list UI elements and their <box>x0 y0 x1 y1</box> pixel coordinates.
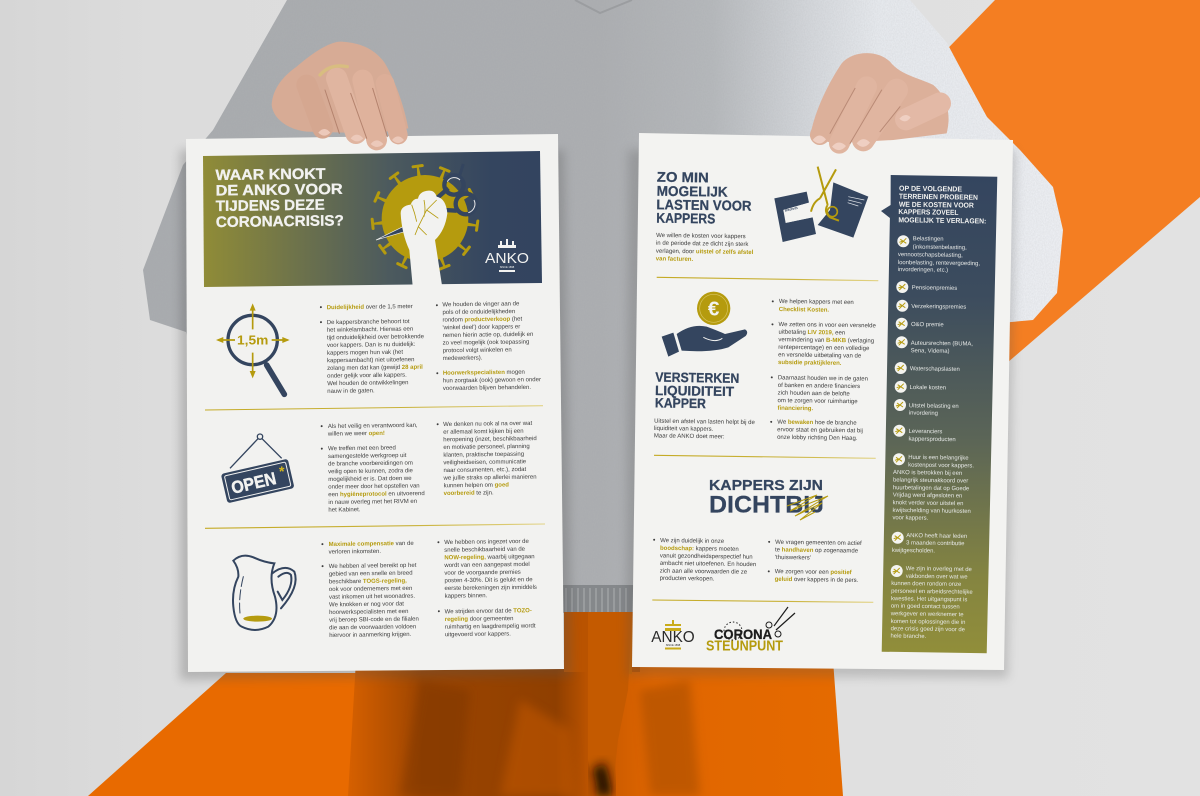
section 3 right column: wordt van een aangepast model <box>443 562 530 569</box>
panel list: loonbelasting, rentevergoeding, <box>898 260 980 267</box>
liquidity bullets: uitbetaling LIV 2019, een <box>778 330 845 337</box>
panel paragraph: huur: kostenpost voor kappers. <box>908 463 974 469</box>
icon: water jug <box>233 556 296 630</box>
section 1 right column: pols of de onduidelijkheden <box>442 309 515 316</box>
icon: euro coin <box>697 292 730 325</box>
icon: Corona Steunpunt logo: CORONA <box>714 626 772 642</box>
liquidity bullets: We zetten ons in voor een versnelde <box>779 322 877 329</box>
section 3 right column: kappers binnen. <box>445 593 488 600</box>
left hand holding poster <box>272 42 408 147</box>
section 1 right column: zo veel mogelijk (ook toepassing <box>443 340 529 347</box>
panel list: Belastingen <box>913 236 944 243</box>
section 3 right column: snelle beschikbaarheid van de <box>444 547 526 554</box>
left poster text, slightly skewed with the sheet <box>215 163 543 641</box>
section 1 right column: We houden de vinger aan de <box>442 301 520 308</box>
section 2 right column: we jullie straks op allerlei manieren <box>442 475 537 482</box>
heading: versterken liquiditeit <box>655 370 739 412</box>
heading: kappers zijn dichtbij: DICHTBIJ <box>709 492 824 518</box>
paper <box>186 134 564 672</box>
section 2 left column: We treffen met een breed <box>328 445 396 452</box>
panel list: kappersproducten <box>908 437 956 443</box>
right poster <box>632 133 1013 670</box>
panel paragraph: huur: ANKO is betrokken bij een <box>893 470 962 477</box>
panel paragraph: vakbonden: We zijn in overleg met de <box>906 566 973 573</box>
ANKO logo white <box>485 239 529 272</box>
intro text: in de periode dat ze dicht zijn sterk <box>656 241 749 248</box>
panel paragraph: contributie: kwijtgescholden. <box>892 548 935 555</box>
section 3 right column: We hebben ons ingezet voor de <box>444 539 530 546</box>
icon: Corona Steunpunt logo: STEUNPUNT <box>706 638 783 654</box>
section 2 left column: samengestelde werkgroep uit <box>328 453 407 460</box>
section 1 left column: voor kappers. Dan is nu duidelijk: <box>327 342 416 349</box>
panel paragraph: huur: huurbetalingen dat op Goede <box>893 485 970 492</box>
icon: Corona Steunpunt logo <box>706 607 795 654</box>
panel paragraph: vakbonden: hele branche. <box>890 634 927 640</box>
section 1 left column: De kappersbranche behoort tot <box>327 319 410 326</box>
section 1 left column: Wel houden de ontwikkelingen <box>327 380 408 387</box>
right poster shadow <box>626 150 1016 678</box>
section 1 left column: kappersambacht) niet uitoefenen <box>327 357 414 364</box>
liquidity bullets: onze lobby richting Den Haag. <box>777 435 858 442</box>
divider <box>205 406 543 410</box>
right hand holding poster <box>810 53 949 150</box>
icon: ANKO logo gold and black <box>651 620 695 650</box>
section 2 right column: kunnen helpen om goed <box>444 482 509 489</box>
closed section bullets right: We vragen gemeenten om actief <box>775 540 862 547</box>
section 1 right column: medewerkers). <box>443 356 483 362</box>
section 2 left column: onder meer door het opstellen van <box>328 483 420 491</box>
section 1 left column: kappers mogen hun vak (het <box>327 350 403 357</box>
section 1 right column: voorwaarden blijven behandelen. <box>443 385 531 392</box>
section 3 left column <box>321 541 419 639</box>
right poster text, slightly skewed with the sheet <box>651 169 987 641</box>
section 3 left column: verloren inkomsten. <box>329 549 381 556</box>
section 1 left column: zolang men dat kan (gewijd 28 april <box>327 365 423 372</box>
section 1 right column: hun zorgtaak (ook) gewoon en onder <box>443 377 541 384</box>
section 3 right column: uitgevoerd voor kappers. <box>445 631 511 638</box>
heading: versterken liquiditeit: VERSTERKEN <box>655 370 739 386</box>
panel heading: MOGELIJK TE VERLAGEN: <box>898 215 986 225</box>
divider <box>657 277 878 281</box>
heading: zo min mogelijk lasten <box>656 169 752 227</box>
section 2 right column: naar consumenten, etc.), zodat <box>443 467 527 474</box>
section 1 left column: nauw in de gaten. <box>327 388 375 395</box>
section 3 left column: hiervoor in aanmerking krijgen. <box>329 632 412 639</box>
panel list: Waterschapslasten <box>910 366 960 373</box>
section 1 right column: 'winkel deel') door kappers er <box>443 324 520 331</box>
panel list: Verzekeringspremies <box>911 304 966 311</box>
section 1 left column: het winkelambacht. Hierwas een <box>327 327 413 334</box>
person: orange trousers <box>348 612 843 796</box>
panel heading: KAPPERS ZOVEEL <box>898 207 959 217</box>
section 1 right column: Hoorwerkspecialisten mogen <box>443 370 525 377</box>
heading: zo min mogelijk lasten: KAPPERS <box>656 210 715 227</box>
section 3 right column: We strijden ervoor dat de TOZO- <box>445 608 532 615</box>
liquidity bullets: Daarnaast houden we in de gaten <box>778 375 868 383</box>
panel heading <box>898 184 987 225</box>
icon: ANKO logo gold and black: ANKO <box>651 629 695 646</box>
section 3 left column: ook voor ondernemers met een <box>329 586 412 593</box>
liquidity intro text: Uitstel en afstel van lasten helpt bij de <box>654 419 756 426</box>
icon: magnifier with 1,5m <box>216 303 290 394</box>
panel paragraph: huur <box>892 455 974 522</box>
liquidity bullets: We helpen kappers met een <box>779 299 854 306</box>
section 3 right column: voor de voorgaande premies <box>444 570 521 577</box>
closed section bullets right: We zorgen voor een positief <box>775 569 853 576</box>
section 3 right column: regeling door gemeenten <box>445 616 513 623</box>
panel heading: TERREINEN PROBEREN <box>899 192 978 202</box>
illustration: fist with scissors on virus <box>372 164 478 286</box>
section 2 left column: mogelijkheid er is. Dat doen we <box>328 476 412 483</box>
section 2 left column <box>321 423 425 514</box>
panel paragraph: contributie <box>892 533 967 555</box>
closed section bullets left: zich aan alle voorwaarden die ze <box>660 568 748 576</box>
virus <box>372 166 478 269</box>
liquidity bullets: of banken en andere financiers <box>778 383 860 390</box>
liquidity bullets: subsidie praktijkleren. <box>778 360 842 367</box>
section 3 left column: vast inkomen uit het woonadres. <box>329 594 415 601</box>
scissors <box>376 164 476 240</box>
liquidity bullets: We bewaken hoe de branche <box>777 420 857 427</box>
panel list: vennootschapsbelasting, <box>898 252 963 259</box>
section 2 left column: Als het veilig en verantwoord kan, <box>328 423 418 430</box>
panel list: O&O premie <box>911 322 944 328</box>
icon: invoice cut by scissors <box>774 167 868 242</box>
panel paragraph: huur: belangrijk steunakkoord over <box>893 478 968 485</box>
section 1 right column: nemen hierin actie op, duidelijk en <box>443 332 533 339</box>
panel paragraph: vakbonden: kwesties. Het uitgangspunt is <box>891 596 967 603</box>
section 2 left column: een hygiëneprotocol en uitvoerend <box>328 491 425 498</box>
section 1 right column: rondom productverkoop (het <box>442 317 523 324</box>
side panel with speech pointer <box>881 175 997 653</box>
heading: kappers zijn dichtbij: KAPPERS ZIJN <box>709 477 823 494</box>
section 2 right column: er allemaal komt kijken bij een <box>443 429 524 436</box>
icon: invoice cut by scissors: afschrift <box>784 206 799 213</box>
panel list <box>895 236 981 444</box>
section 3 right column: ruimhartig en laagdrempelig wordt <box>445 623 536 631</box>
section 3 left column: beschikbare TOGS-regeling, <box>329 578 407 585</box>
panel list icons <box>891 235 909 577</box>
liquidity intro text: Maar de ANKO doet meer: <box>654 433 725 440</box>
liquidity bullets: ervoor staat en gebruiken dat bij <box>777 427 863 434</box>
divider <box>205 524 545 528</box>
icon: euro coin: € <box>708 297 720 320</box>
closed section bullets left: vanuit gezondheidsperspectief hun <box>660 553 753 561</box>
section 2 right column: voorbereid te zijn. <box>444 490 494 497</box>
heading: zo min mogelijk lasten: MOGELIJK <box>657 183 728 200</box>
closed section bullets left <box>653 538 757 583</box>
raised fist <box>401 191 447 286</box>
section 3 left column: We hebben al veel bereikt op het <box>329 563 417 570</box>
panel list: Auteursrechten (BUMA, <box>911 341 973 348</box>
panel paragraph: vakbonden: vakbonden over wat we <box>906 574 968 581</box>
section 1 left column: tijd onduidelijkheid over betrokkende <box>327 334 425 341</box>
liquidity bullets <box>770 299 877 442</box>
title: TIJDENS DEZE <box>216 197 325 215</box>
closed section bullets right: geluid over kappers in de pers. <box>775 577 859 584</box>
liquidity bullets: zich houden aan de belofte <box>778 391 850 398</box>
heading: kappers zijn dichtbij <box>709 477 824 518</box>
panel paragraph: huur: knokt verder voor uitstel en <box>893 500 963 507</box>
panel paragraph: vakbonden: kunnen doen rondom onze <box>891 581 962 588</box>
panel paragraph: contributie: ANKO heeft haar leden <box>906 533 967 540</box>
panel paragraph: huur: voor kappers. <box>892 515 929 522</box>
section 3 left column: vrij beroep SBI-code en de filialen <box>329 617 419 624</box>
closed section bullets right: te handhaven op zogenaamde <box>775 547 859 555</box>
closed section bullets left: boodschap: kappers moeten <box>660 546 739 553</box>
section 2 right column: en motivatie personeel, planning <box>443 444 530 451</box>
panel paragraph: vakbonden: deze crisis goed zijn voor de <box>891 626 966 633</box>
closed section bullets right <box>768 540 862 584</box>
orange diagonal band top right <box>800 0 1200 369</box>
liquidity bullets: rentepercentage) en een volledige <box>778 345 870 352</box>
left poster shadow <box>180 150 572 680</box>
icon: OPEN sign <box>221 434 294 503</box>
person: sweater <box>140 0 1070 613</box>
section 2 left column: de branche voorbereidingen om <box>328 461 413 468</box>
paper <box>632 133 1013 670</box>
title <box>215 165 344 231</box>
DICHTBIJ heading with scribble <box>709 477 828 520</box>
liquidity intro text: liquiditeit van kappers. <box>654 426 714 433</box>
left poster <box>186 134 564 672</box>
panel list: Pensioenpremies <box>912 285 957 292</box>
panel paragraph: vakbonden: komen tot oplossingen die in <box>891 619 965 626</box>
panel list: Sena, Videma) <box>911 348 950 355</box>
panel list: Leveranciers <box>909 429 942 435</box>
section 2 left column: het Kabinet. <box>328 507 361 514</box>
closed section bullets left: producten verkopen. <box>660 576 715 583</box>
panel list: invordering <box>909 411 938 417</box>
heading: versterken liquiditeit: LIQUIDITEIT <box>655 383 735 399</box>
ANKO logo white: SINCE 1898 <box>500 265 515 269</box>
section 2 right column: klanten, praktische toepassing <box>443 452 524 459</box>
banner background <box>203 151 542 287</box>
panel list: invorderingen, etc.) <box>898 267 948 274</box>
section 2 left column: willen we weer open! <box>327 431 385 438</box>
liquidity bullets: Checklist Kosten. <box>779 307 829 314</box>
section 2 left column: veilig open te kunnen, zodra die <box>328 468 414 475</box>
closed section bullets left: We zijn duidelijk in onze <box>660 538 725 545</box>
panel paragraph: huur: Huur is een belangrijke <box>908 455 969 462</box>
liquidity bullets: om te zorgen voor ruimhartige <box>778 398 858 405</box>
liquidity bullets: en versnelde uitbetaling van de <box>778 352 862 360</box>
heading: versterken liquiditeit: KAPPER <box>655 395 706 411</box>
icon: OPEN sign: * <box>279 463 285 479</box>
panel paragraph: vakbonden: werkgever en werknemer te <box>890 611 964 618</box>
section 3 right column: posten 4-30%. Dit is gelukt en de <box>444 577 533 584</box>
heading: zo min mogelijk lasten: LASTEN VOOR <box>656 196 752 214</box>
icon: OPEN sign: OPEN <box>229 468 278 498</box>
liquidity bullets: financiering. <box>777 406 814 412</box>
panel paragraph: vakbonden: personeel en arbeidsrechtelijke <box>891 589 973 596</box>
section 1 left column <box>320 304 425 395</box>
intro text <box>656 233 754 264</box>
section 3 left column: We knokken er nog voor dat <box>329 601 404 608</box>
section 3 left column: gebied van een snelle en breed <box>329 571 413 578</box>
liquidity intro text <box>654 419 756 441</box>
panel paragraph: vakbonden <box>889 566 974 641</box>
section 3 left column: hoorwerkspecialisten met een <box>329 609 408 616</box>
panel list: (inkomstenbelasting, <box>913 245 967 251</box>
section 3 right column <box>437 539 537 638</box>
section 3 right column: eerste berekeningen zijn inmiddels <box>445 585 537 592</box>
panel list: Uitstel belasting en <box>909 403 959 410</box>
divider <box>652 600 873 602</box>
panel paragraph: contributie: 3 maanden contributie <box>906 540 965 547</box>
section 2 right column: We denken nu ook al na over wat <box>443 421 532 428</box>
divider <box>654 455 876 458</box>
section 1 left column: Duidelijkheid over de 1,5 meter <box>327 304 413 311</box>
icon: ANKO logo gold and black: SINCE 1898 <box>666 643 681 647</box>
closed section bullets right: 'thuiswerkers' <box>775 555 811 562</box>
panel heading: OP DE VOLGENDE <box>899 184 962 194</box>
icon: open hand <box>662 326 747 357</box>
intro text: verlagen, door uitstel of zelfs afstel <box>656 249 754 256</box>
title: WAAR KNOKT <box>215 166 326 184</box>
panel paragraph: huur: kwijtschelding van huurkosten <box>893 508 971 515</box>
panel list: Lokale kosten <box>910 385 946 391</box>
panel heading: WE DE KOSTEN VOOR <box>899 200 975 210</box>
section 2 right column: veiligheidseisen, communicatie <box>443 459 527 466</box>
title: CORONACRISIS? <box>216 212 344 231</box>
section 1 right column <box>436 301 541 392</box>
icon: magnifier with 1,5m: 1,5m <box>237 333 268 348</box>
heading: zo min mogelijk lasten: ZO MIN <box>657 169 709 185</box>
panel paragraph: huur: Vrijdag werd afgesloten en <box>893 493 962 500</box>
section 2 right column: heropening (inzet, beschikbaarheid <box>443 436 537 443</box>
section 2 right column <box>437 421 537 497</box>
section 1 left column: onder gelijk voor alle kappers. <box>327 373 407 380</box>
liquidity bullets: vermindering van B-MKB (verlaging <box>778 337 874 345</box>
orange diagonal band bottom left <box>88 673 360 796</box>
intro text: We willen de kosten voor kappers <box>656 233 746 240</box>
section 1 right column: protocol volgt winkelen en <box>443 347 512 354</box>
closed section bullets left: ambacht niet uitoefenen. En houden <box>660 561 756 568</box>
section 3 left column: die aan de voorwaarden voldoen <box>329 624 416 631</box>
ANKO logo white: ANKO <box>485 251 529 267</box>
section 3 right column: NOW-regeling, waarbij uitgegaan <box>444 554 535 561</box>
intro text: van facturen. <box>656 256 694 263</box>
section 3 left column: Maximale compensatie van de <box>329 541 414 548</box>
section 2 left column: in nauw overleg met het RIVM en <box>328 499 417 506</box>
title: DE ANKO VOOR <box>216 181 343 200</box>
panel paragraph: vakbonden: om in goed contact tussen <box>891 604 960 610</box>
